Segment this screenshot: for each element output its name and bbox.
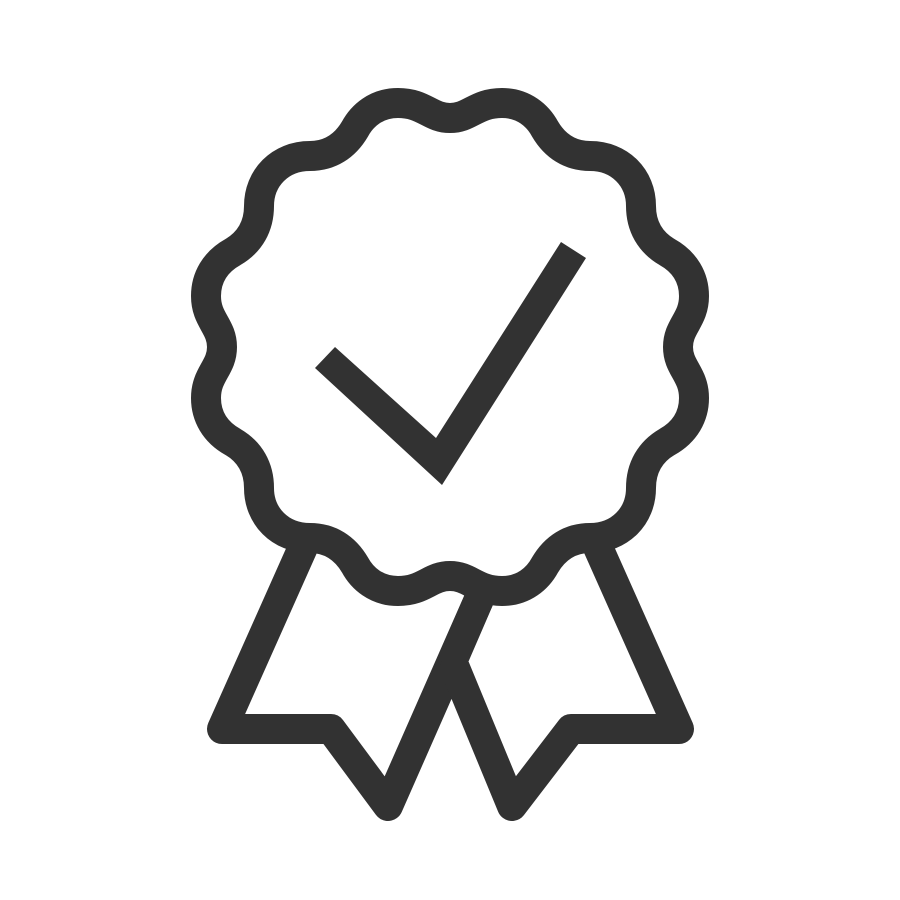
- icon: award rosette badge with check mark: [206, 103, 694, 806]
- icon: left ribbon tail: [222, 545, 480, 806]
- icon: check mark: [315, 242, 586, 485]
- icon: right ribbon tail: [455, 545, 679, 806]
- icon: scalloped seal outline: [206, 103, 694, 591]
